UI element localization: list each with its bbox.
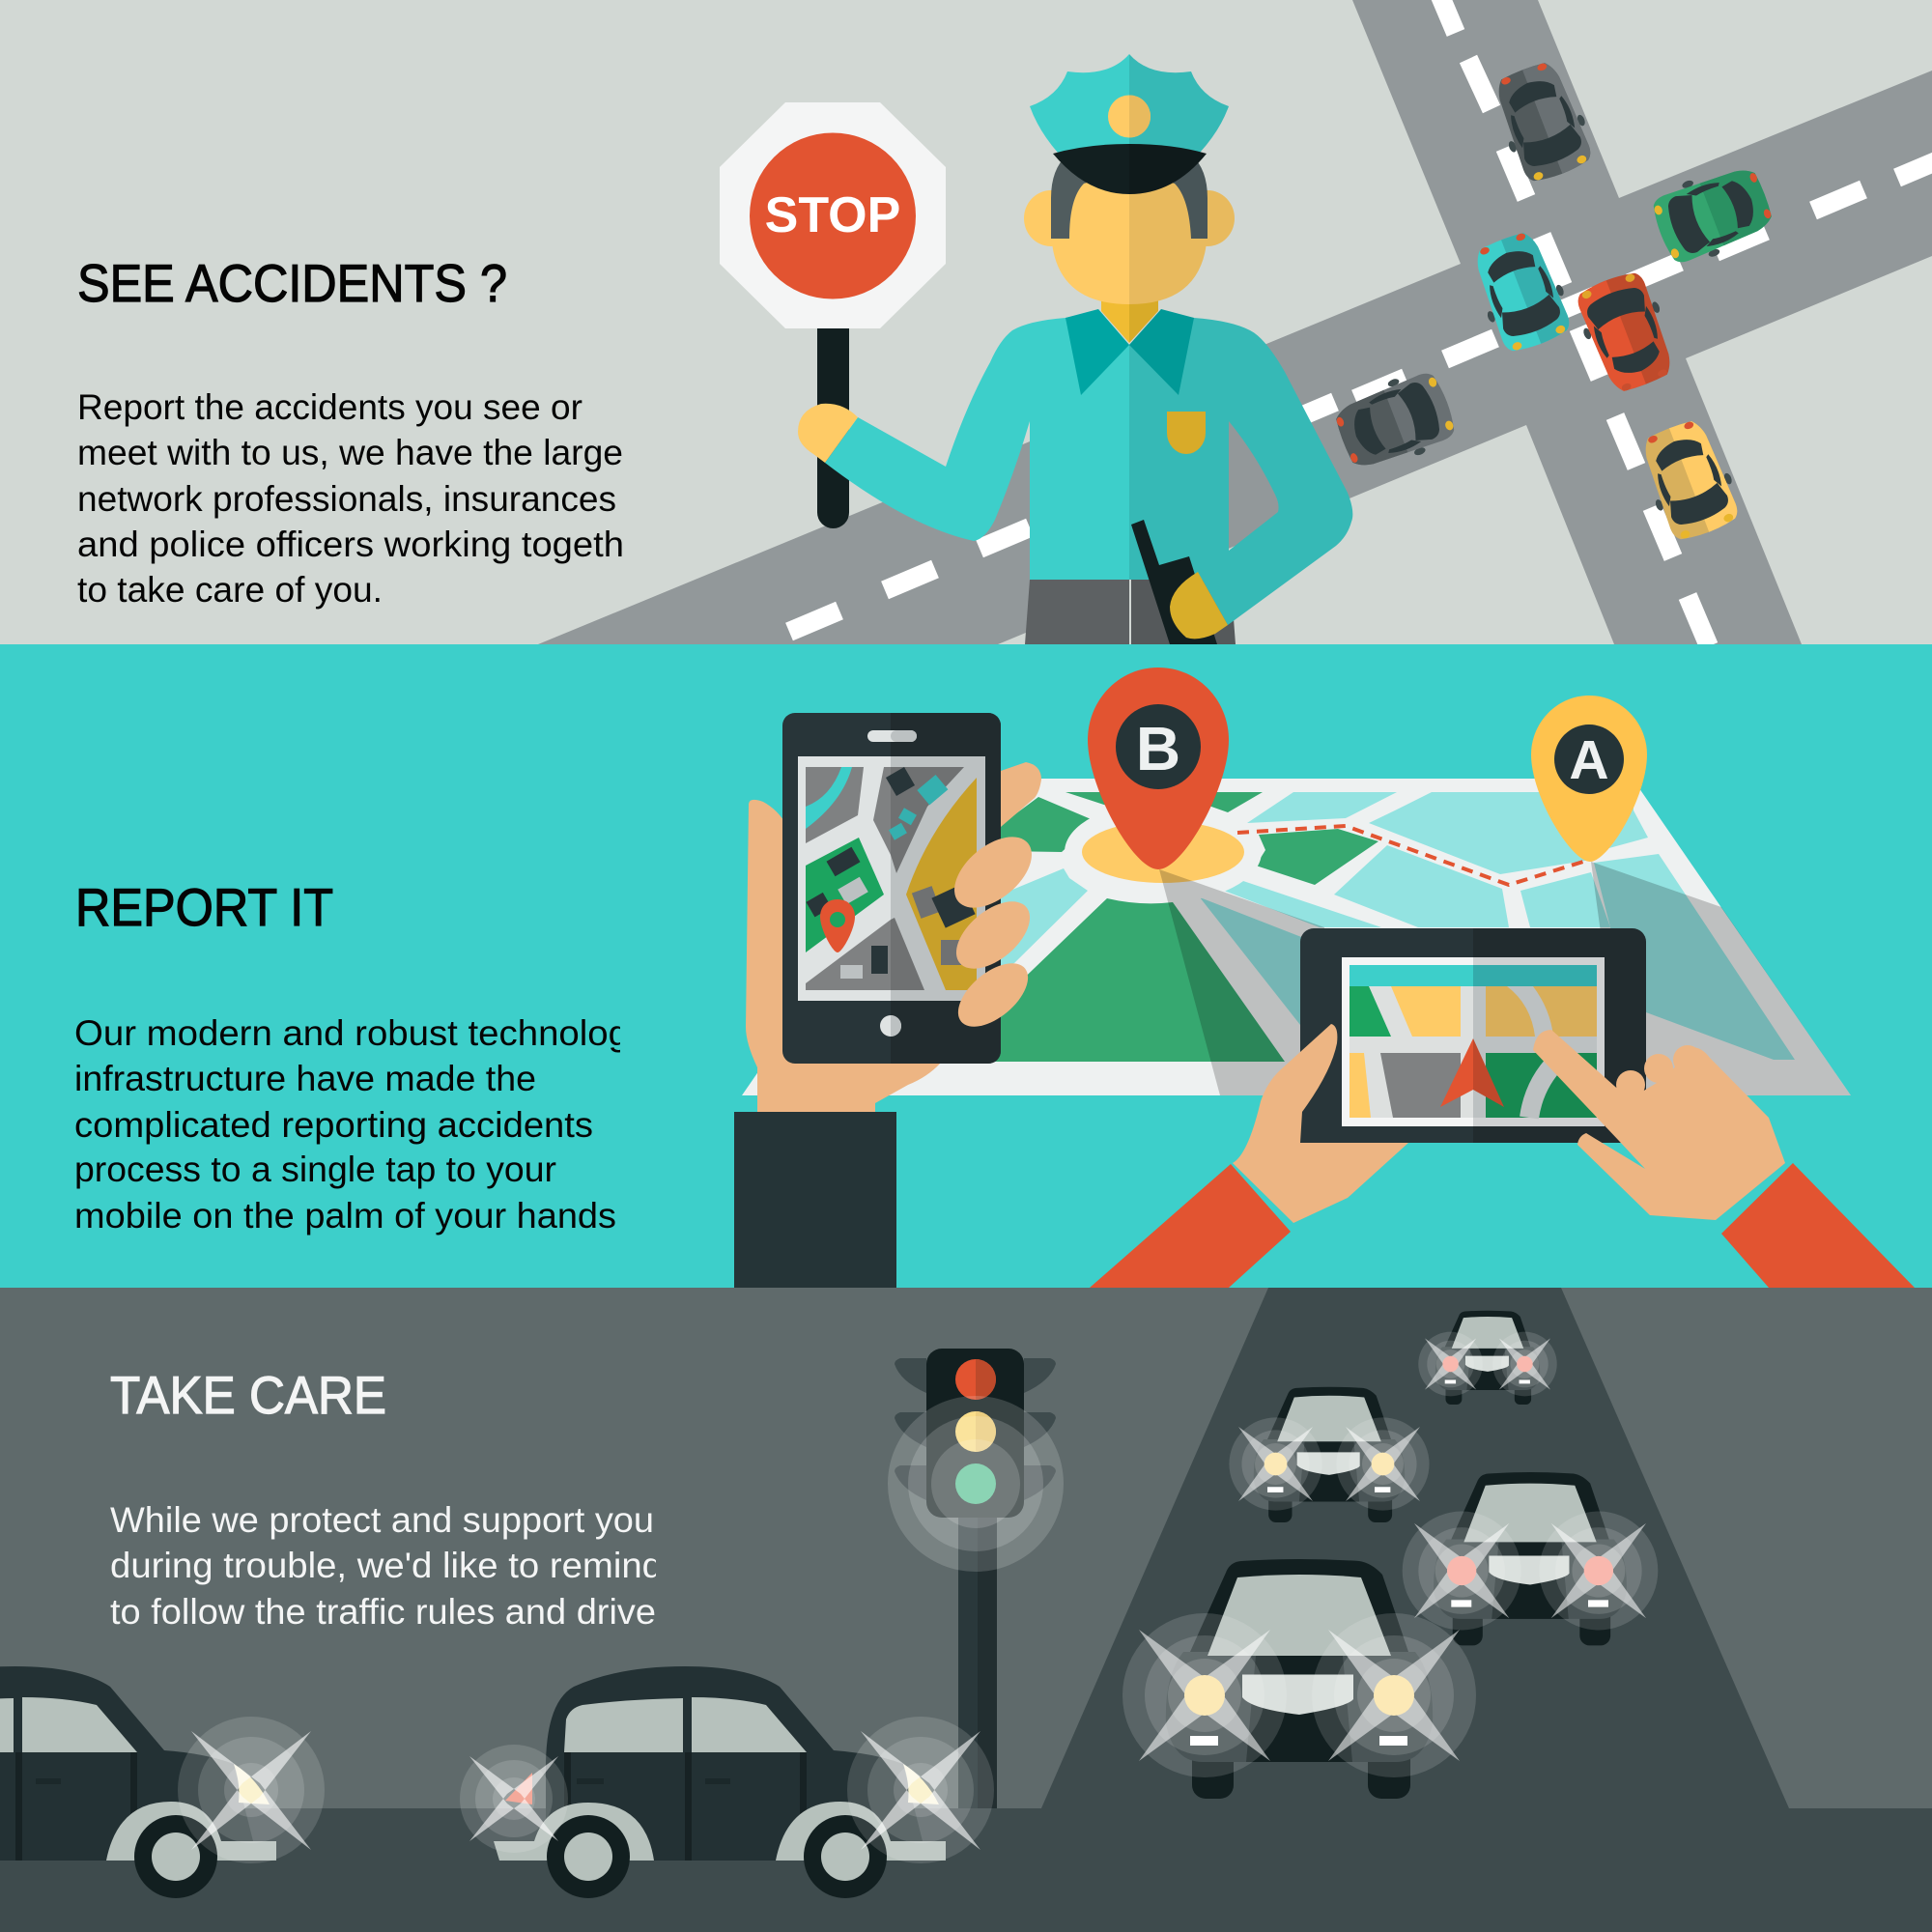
body text: take care: during trouble, we'd like to remind xyxy=(110,1546,663,1585)
body text: see accidents xyxy=(77,387,624,610)
body text: report it xyxy=(74,1013,629,1236)
phone xyxy=(782,713,1001,1064)
traffic light xyxy=(888,1349,1064,1808)
walkie talkie xyxy=(1131,520,1217,644)
right red sleeve xyxy=(1721,1163,1915,1288)
heading: take care: TAKE CARE xyxy=(110,1365,386,1425)
front car red xyxy=(1403,1472,1658,1645)
body text: take care: While we protect and support you xyxy=(110,1500,654,1540)
right hand xyxy=(1170,572,1228,639)
car: teal xyxy=(1460,209,1600,370)
neck xyxy=(1101,295,1158,343)
body text: see accidents: meet with to us, we have the large xyxy=(77,433,623,472)
body text: see accidents: network professionals, insurances xyxy=(77,479,616,519)
body text: report it: mobile on the palm of your hands xyxy=(74,1196,616,1236)
stop sign: STOP xyxy=(765,187,900,243)
body text: see accidents: and police officers working togeth xyxy=(77,525,624,564)
police officer xyxy=(798,54,1352,644)
heading: report it: REPORT IT xyxy=(75,877,333,937)
body text: report it: infrastructure have made the xyxy=(74,1059,536,1098)
pin A: A xyxy=(1569,729,1609,791)
panel: take care xyxy=(0,1288,1932,1932)
map xyxy=(742,779,1851,1095)
hair xyxy=(1051,155,1208,239)
car: red xyxy=(1548,254,1688,415)
body text: see accidents: Report the accidents you see or xyxy=(77,387,582,427)
body text: report it: complicated reporting accidents xyxy=(74,1105,593,1145)
hat xyxy=(1030,54,1229,194)
side car center xyxy=(460,1666,994,1898)
car: gray upper xyxy=(1481,39,1621,200)
side car left xyxy=(0,1666,325,1898)
fingers xyxy=(942,823,1044,1038)
body text: take care xyxy=(110,1506,656,1625)
body text: see accidents: to take care of you. xyxy=(77,570,383,610)
car: green xyxy=(1640,136,1796,288)
front car yellow xyxy=(1229,1387,1430,1522)
left red sleeve xyxy=(1090,1164,1291,1288)
ears xyxy=(1024,190,1235,246)
pin A xyxy=(1531,696,1647,862)
phone screen map xyxy=(806,767,977,990)
panel: report it xyxy=(0,644,1932,1288)
panel: see accidents xyxy=(0,0,1932,646)
hand holding phone xyxy=(746,762,1041,1112)
pin B xyxy=(1088,668,1229,869)
face xyxy=(1051,164,1208,304)
tablet xyxy=(1300,928,1646,1143)
body text: report it: process to a single tap to your xyxy=(74,1150,556,1189)
pin B: B xyxy=(1136,714,1180,783)
heading: see accidents: SEE ACCIDENTS ? xyxy=(77,253,507,313)
body text: report it: Our modern and robust technolog xyxy=(74,1013,629,1053)
front car small red xyxy=(1418,1311,1557,1405)
trousers xyxy=(1025,580,1236,644)
car: gray lower xyxy=(1312,348,1467,499)
stop sign xyxy=(720,102,946,528)
shirt xyxy=(825,309,1352,625)
crossroads xyxy=(538,0,1932,646)
left hand on tablet xyxy=(1233,1024,1408,1223)
pointing hand xyxy=(1533,1030,1785,1220)
sleeve xyxy=(734,1112,896,1288)
car: yellow xyxy=(1628,397,1768,558)
road xyxy=(0,1288,1932,1932)
front car large yellow xyxy=(1122,1559,1476,1799)
body text: take care: to follow the traffic rules and drive xyxy=(110,1592,656,1632)
left hand xyxy=(798,404,858,463)
